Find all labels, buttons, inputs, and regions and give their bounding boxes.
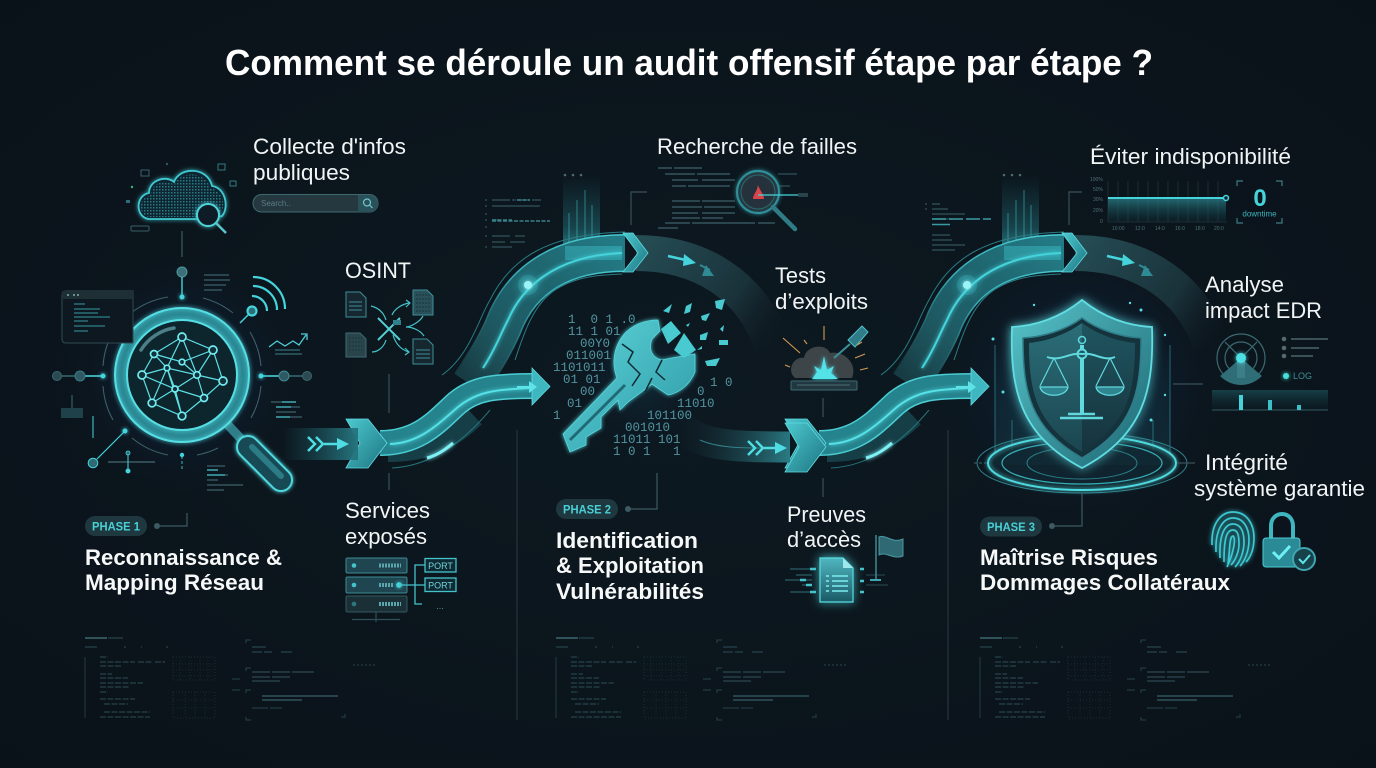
- chart: downtime: 0: [1100, 219, 1103, 225]
- label line 2: impact EDR: [1205, 298, 1322, 323]
- left connector nodes: [52, 371, 106, 381]
- binary digits left: 1101011: [553, 361, 606, 375]
- code snippet: phase 2: [485, 200, 550, 247]
- binary digits right: 101100: [647, 409, 692, 423]
- chart: downtime: 30%: [1093, 197, 1104, 203]
- binary digits right: 11010: [677, 397, 715, 411]
- key fragments: [661, 299, 728, 366]
- icon: cloud search: [126, 163, 236, 233]
- label line 2: exposés: [345, 524, 427, 549]
- phase 1 tag: [85, 513, 187, 536]
- heading: phase 3: Maîtrise Risques: [980, 545, 1158, 570]
- label: Collecte d'infos publiques: Collecte d'infos: [253, 134, 406, 159]
- heading line 3: Vulnérabilités: [556, 579, 704, 604]
- binary digits left: 01: [567, 397, 582, 411]
- icon: padlock with check: [1263, 514, 1315, 570]
- scales of justice: [1040, 336, 1124, 418]
- icon: wifi signal: [240, 277, 285, 323]
- label line 2: système garantie: [1194, 476, 1365, 501]
- arrow band: magnifier to chevron: [282, 428, 358, 460]
- icon: EDR radar and bars: LOG: [1293, 371, 1312, 381]
- heading: phase 2: Identification: [556, 528, 698, 553]
- phase 1 tag: PHASE 1: [92, 520, 140, 534]
- small text lines near magnifier: [204, 275, 302, 490]
- chart: downtime: 14:0: [1155, 226, 1165, 232]
- code snippet: phase 3: [925, 204, 991, 250]
- chart: downtime: 0: [1253, 185, 1267, 212]
- binary digits right: 1 0: [710, 376, 733, 390]
- icon: server ports: PORT: [428, 580, 453, 590]
- chart: downtime: [1069, 177, 1282, 232]
- icon: code scan magnifier: [631, 168, 808, 229]
- code block: phase 1: [85, 638, 375, 720]
- chart: downtime: 18:0: [1195, 226, 1205, 232]
- label: Éviter indisponibilité: Éviter indisponibilité: [1090, 144, 1291, 169]
- chart: downtime: 12:0: [1135, 226, 1145, 232]
- phase 2 tag: PHASE 2: [563, 502, 611, 516]
- binary digits left: 11 1 01: [568, 325, 621, 339]
- icon: broken key: [563, 299, 728, 452]
- label: Analyse impact EDR: Analyse: [1205, 272, 1284, 297]
- network graph: [142, 337, 223, 416]
- outer dashed arcs: [103, 297, 261, 455]
- holographic base: [974, 340, 1195, 513]
- binary digits right: 11011 101: [613, 433, 681, 447]
- code block: phase 3: [980, 638, 1270, 720]
- second chevron: [785, 423, 826, 472]
- icon: fingerprint: [1212, 512, 1254, 567]
- flow ribbons: phase 2 to 3: [785, 174, 1211, 468]
- icon: server ports: ...: [436, 601, 444, 611]
- connector lines around chevron: [388, 374, 390, 490]
- phase 2 tag: [556, 473, 657, 519]
- binary digits left: 00Y0: [580, 337, 610, 351]
- flow ribbons: phase 1 to 2: [346, 174, 772, 468]
- binary digits left: [553, 313, 636, 423]
- icon: trend chart: [269, 334, 307, 354]
- label: Preuves d'accès: Preuves: [787, 502, 866, 527]
- chart: downtime: 50%: [1093, 187, 1104, 193]
- heading line 2: Dommages Collatéraux: [980, 570, 1231, 595]
- shield outer: [1012, 300, 1152, 468]
- icon: shield with scales: [974, 300, 1195, 513]
- heading line 2: & Exploitation: [556, 553, 704, 578]
- label line 2: publiques: [253, 160, 350, 185]
- label: Recherche de failles: Recherche de failles: [657, 134, 857, 159]
- chart: downtime: 20:0: [1214, 226, 1224, 232]
- label: Intégrité système garantie: Intégrité: [1205, 450, 1288, 475]
- sparkles: [992, 302, 1166, 422]
- chart: downtime: 100%: [1090, 177, 1103, 183]
- heading: phase 1: Reconnaissance &: [85, 545, 282, 570]
- binary digits left: 1 0 1 .0: [568, 313, 636, 327]
- icon: proof document and flag: [785, 535, 903, 602]
- binary digits right: 001010: [625, 421, 670, 435]
- binary digits right: 0: [697, 385, 705, 399]
- column dividers: [517, 430, 948, 720]
- icon: OSINT documents: [346, 290, 433, 364]
- chart: downtime: downtime: [1242, 210, 1277, 218]
- connector: cloud to magnifier: [177, 231, 187, 300]
- title: Comment se déroule un audit offensif étape par étape ?: [225, 42, 1153, 83]
- handle: [228, 425, 281, 480]
- search bar: Search..: [261, 199, 291, 208]
- icon: server ports: [346, 558, 456, 622]
- bottom-left network details: [61, 395, 184, 474]
- label: Tests d'exploits: Tests: [775, 263, 826, 288]
- browser code panel: [62, 291, 133, 343]
- chart: downtime: 20%: [1093, 208, 1104, 214]
- connector above Preuves: [822, 478, 824, 497]
- phase 3 tag: PHASE 3: [987, 520, 1035, 534]
- binary digits left: 011001: [566, 349, 611, 363]
- heading line 2: Mapping Réseau: [85, 570, 264, 595]
- label: Services exposés: Services: [345, 498, 430, 523]
- icon: main magnifier with network: [103, 297, 281, 480]
- glow halos: [57, 235, 1232, 535]
- label line 2: d’accès: [787, 527, 861, 552]
- icon: exploit burst: [783, 326, 868, 417]
- phase 3 tag: [980, 513, 1082, 536]
- binary digits left: 1: [553, 409, 561, 423]
- binary digits right: [613, 376, 733, 459]
- ring: [121, 314, 243, 436]
- icon: server ports: PORT: [428, 561, 453, 571]
- icon: EDR radar and bars: [1173, 334, 1328, 410]
- binary digits right: 1 0 1 1: [613, 445, 681, 459]
- label line 2: d’exploits: [775, 289, 868, 314]
- binary digits left: 00: [580, 385, 595, 399]
- chart: downtime: 10:00: [1112, 226, 1125, 232]
- search bar: [253, 194, 378, 212]
- right connector nodes: [258, 371, 312, 381]
- binary digits left: 01 01: [563, 373, 601, 387]
- lower dim band into second chevron: [672, 418, 826, 472]
- label: OSINT: OSINT: [345, 258, 411, 283]
- chart: downtime: 16:0: [1175, 226, 1185, 232]
- code block: phase 2: [556, 638, 846, 720]
